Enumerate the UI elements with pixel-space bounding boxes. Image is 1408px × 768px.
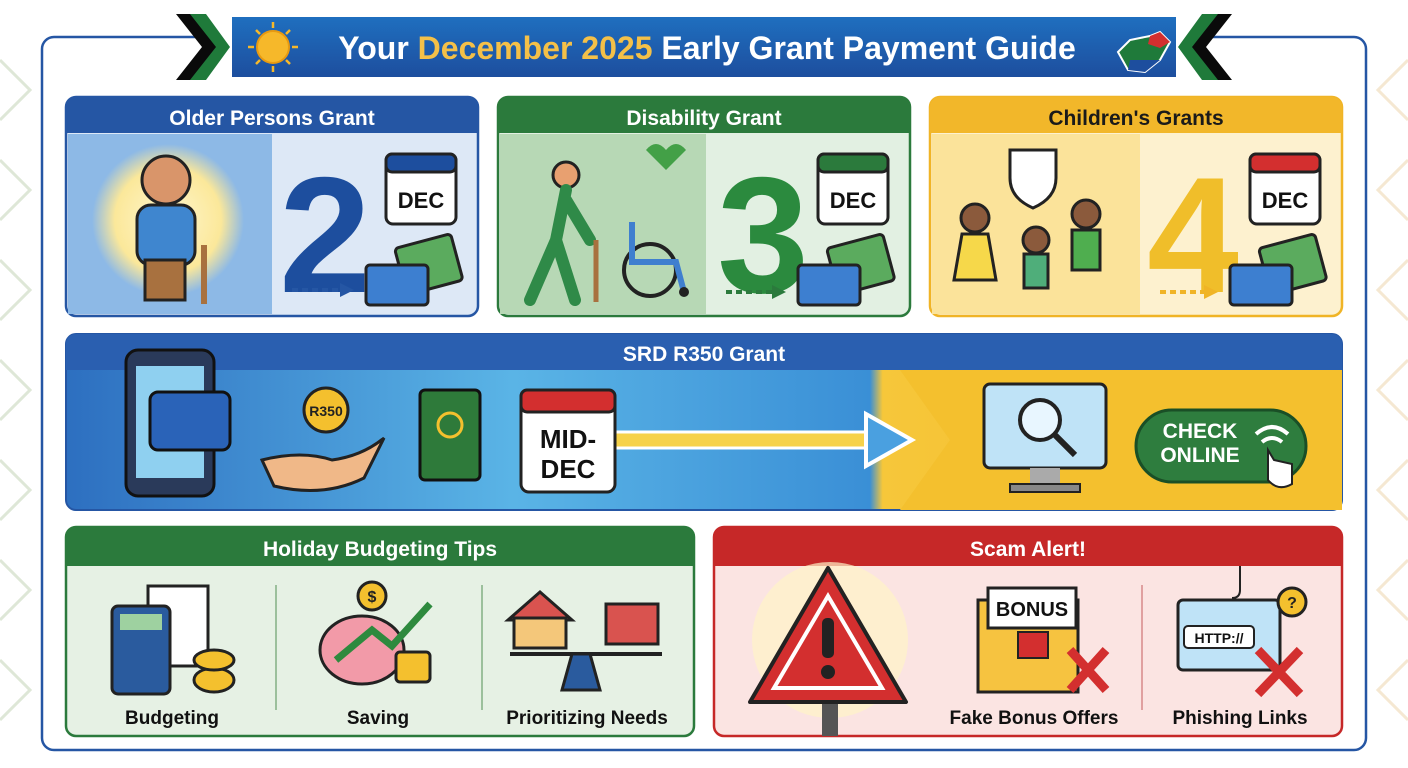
panel: SRD R350 xyxy=(66,334,1342,510)
item: fake bonus offers: BONUS xyxy=(996,599,1068,621)
arrow xyxy=(726,285,786,299)
panel: SRD R350: SRD R350 Grant xyxy=(623,343,785,366)
item: budgeting: Budgeting xyxy=(125,708,219,729)
icon: card and cash xyxy=(366,234,463,305)
icon: calendar DEC: DEC xyxy=(1262,188,1308,213)
big number 4: 4 xyxy=(1147,143,1239,327)
item: phishing links: Phishing Links xyxy=(1172,708,1308,729)
icon: phone wallet xyxy=(126,350,230,496)
item: phishing links: ? xyxy=(1287,595,1297,612)
item: phishing links: HTTP:// xyxy=(1194,630,1244,646)
item: prioritizing needs: Prioritizing Needs xyxy=(506,708,668,729)
title text: Your December 2025 Early Grant Payment Guide xyxy=(338,30,1076,66)
icon: calendar DEC xyxy=(1250,154,1320,224)
arrow xyxy=(292,283,354,297)
panel: holiday budgeting tips xyxy=(66,527,694,736)
panel: disability: Disability Grant xyxy=(626,107,782,130)
button: check online: ONLINE xyxy=(1160,444,1240,467)
arrow xyxy=(1160,285,1218,299)
icon: elderly man xyxy=(92,144,244,304)
icon: monitor magnifier xyxy=(984,384,1106,492)
big number 3: 3 xyxy=(717,143,809,327)
item: fake bonus offers xyxy=(950,588,1118,729)
panel: disability xyxy=(498,97,910,327)
panel: children: Children's Grants xyxy=(1048,107,1224,130)
button: check online xyxy=(1136,410,1306,487)
title banner xyxy=(176,14,1232,80)
icon: sun xyxy=(248,22,298,72)
icon: hand with coin xyxy=(262,388,384,490)
panel: children xyxy=(930,97,1342,327)
icon: calendar DEC xyxy=(386,154,456,224)
big number 2: 2 xyxy=(279,143,371,327)
icon: calendar DEC: DEC xyxy=(830,188,876,213)
item: saving xyxy=(320,582,430,729)
item: saving: $ xyxy=(368,589,377,606)
item: budgeting xyxy=(112,586,234,729)
button: check online: CHECK xyxy=(1163,420,1237,443)
panel: older persons xyxy=(66,97,478,327)
item: prioritizing needs xyxy=(506,592,668,729)
icon: calendar DEC: DEC xyxy=(398,188,444,213)
icon: card and cash xyxy=(1230,234,1327,305)
icon: warning triangle xyxy=(750,562,908,736)
icon: calendar MID-DEC: MID- xyxy=(540,424,596,454)
panel: scam alert: Scam Alert! xyxy=(970,538,1086,561)
icon: calendar DEC xyxy=(818,154,888,224)
item: saving: Saving xyxy=(347,708,409,729)
icon: children and shield xyxy=(954,150,1100,288)
icon: walker and wheelchair xyxy=(530,144,689,302)
icon: hand with coin: R350 xyxy=(309,403,343,419)
panel: holiday budgeting tips: Holiday Budgeting Tips xyxy=(263,538,497,561)
item: phishing links xyxy=(1172,566,1308,729)
icon: SA map xyxy=(1118,32,1170,72)
icon: card and cash xyxy=(798,234,895,305)
icon: calendar MID-DEC: DEC xyxy=(541,454,596,484)
panel: older persons: Older Persons Grant xyxy=(169,107,375,130)
icon: calendar MID-DEC xyxy=(521,390,615,492)
item: fake bonus offers: Fake Bonus Offers xyxy=(950,708,1118,729)
arrow: long xyxy=(600,414,912,466)
panel: scam alert xyxy=(714,527,1342,736)
icon: ID book xyxy=(420,390,480,480)
